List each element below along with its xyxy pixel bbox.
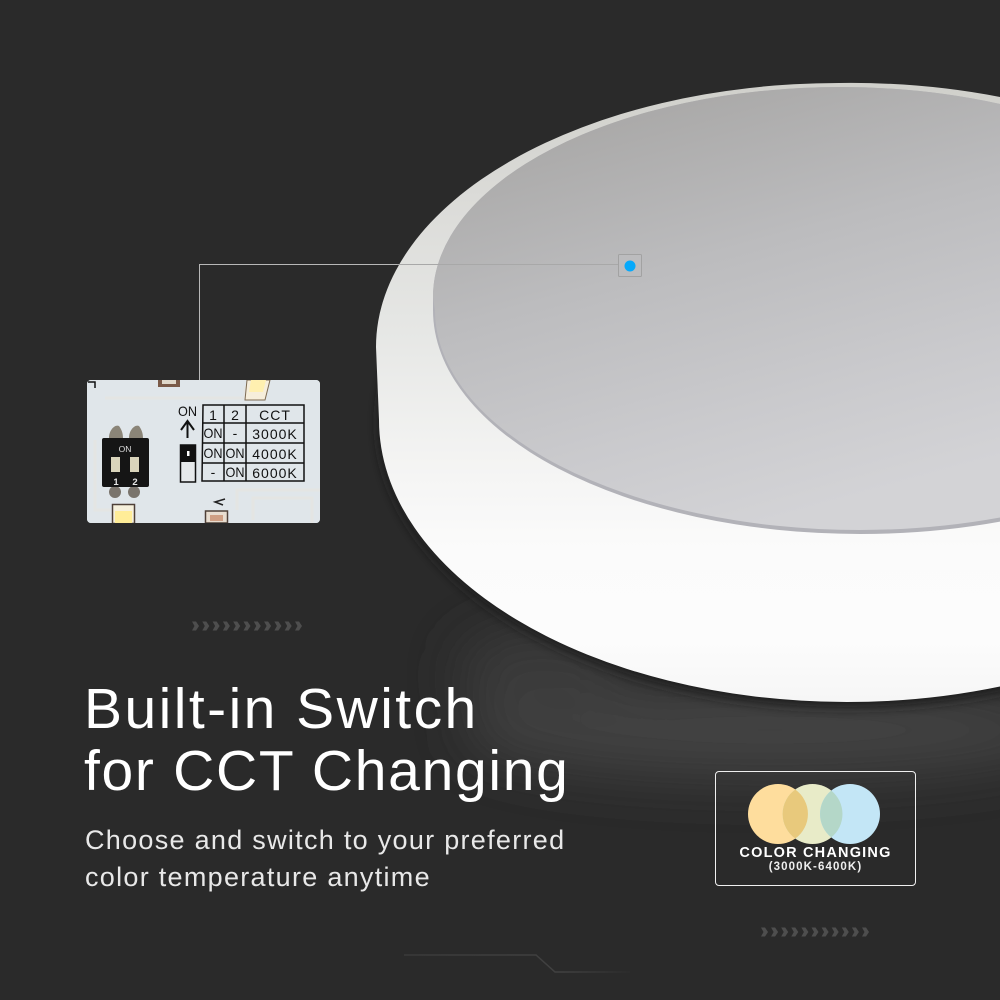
inset photo: DIP switch and CCT table [87,380,320,523]
CCT table: 3000K [252,426,298,442]
CCT table: - [233,425,238,441]
leader line [200,264,397,380]
body text [85,825,565,892]
body text: color temperature anytime [85,862,431,892]
contact shadow [379,139,1000,707]
CCT table [202,405,304,481]
CCT table: 4000K [252,446,298,462]
CCT table: CCT [259,407,291,423]
LED chips [88,380,270,524]
heading: for CCT Changing [84,739,570,803]
CCT table: 1 [209,407,217,423]
DIP switch: 1 [113,477,119,488]
glow beneath the lamp [455,628,1000,778]
CCT table: - [211,464,216,480]
faint circuit traces [95,386,320,523]
body text: Choose and switch to your preferred [85,825,565,855]
heading [84,677,570,803]
ON arrow and slider symbol: ON [178,403,197,419]
badge sublabel: (3000K-6400K) [769,861,862,873]
CCT table: ON [226,445,244,461]
DIP switch: ON [119,444,131,454]
ON arrow and slider symbol [178,403,197,482]
frosted lens [433,87,1000,530]
CCT table: 2 [231,407,239,423]
overlapping color circles [748,784,880,844]
DIP switch [102,426,149,498]
decorative chevrons right [761,928,869,936]
CCT table: 6000K [252,465,298,481]
lens lip [433,87,1000,534]
badge label: COLOR CHANGING [739,845,892,861]
DIP switch: 2 [132,477,138,488]
CCT table: ON [204,425,222,441]
badge: color changing [715,771,916,886]
decorative circuit line [404,955,630,972]
decorative chevrons left [192,622,302,630]
lamp body and rim [376,83,1000,702]
CCT table: ON [226,464,244,480]
heading: Built-in Switch [84,677,479,741]
CCT table: ON [204,445,222,461]
hotspot marker [618,254,642,276]
